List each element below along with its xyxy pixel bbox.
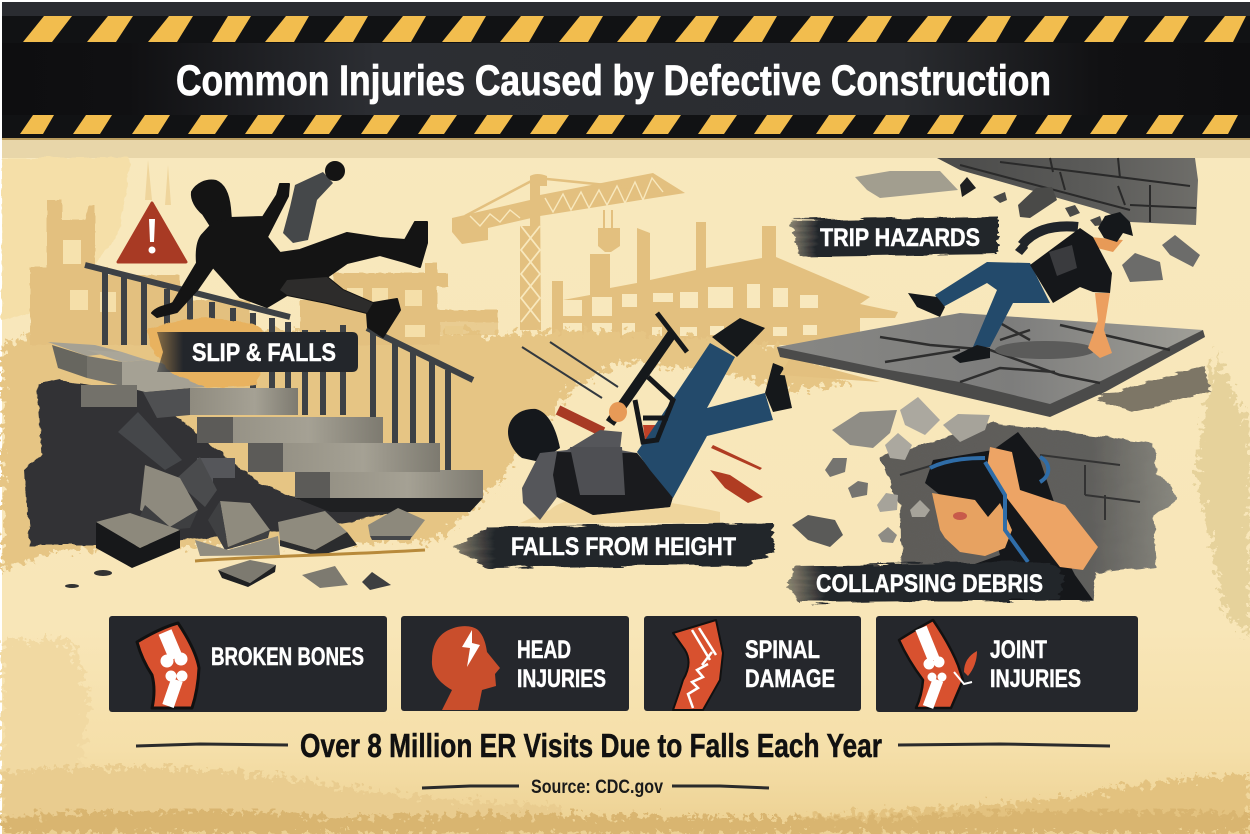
hazard stripes: top [23, 16, 1246, 42]
illustration: trip hazards [777, 158, 1210, 417]
crumbling wall [937, 158, 1198, 225]
wall rocks [792, 397, 990, 547]
text: spinal damage: SPINAL [745, 636, 820, 664]
crane silhouette [452, 173, 685, 330]
text: head injuries: HEAD [517, 636, 571, 664]
icon: head with lightning [432, 626, 500, 710]
label: slip and falls: SLIP & FALLS [192, 339, 336, 367]
red shards [710, 445, 763, 503]
text: spinal damage: DAMAGE [745, 665, 835, 693]
centre building silhouette [440, 222, 898, 345]
label: trip hazards: TRIP HAZARDS [820, 224, 980, 252]
panel: joint injuries [876, 616, 1138, 712]
header banner [2, 2, 1250, 140]
text: joint injuries: INJURIES [990, 665, 1081, 693]
label: slip and falls [148, 318, 358, 388]
slab shadow [1095, 365, 1210, 412]
concrete steps [48, 342, 483, 512]
text: broken bones: BROKEN BONES [211, 643, 364, 671]
label: collapsing debris: COLLAPSING DEBRIS [816, 570, 1043, 598]
title: Common Injuries Caused by Defective Construction [176, 57, 1051, 105]
sheltering worker [925, 432, 1098, 600]
red bar [558, 410, 603, 432]
hazard stripes: bottom [20, 115, 1238, 134]
ladder frame [609, 313, 687, 442]
ground wash behind centre [470, 331, 850, 480]
panel: broken bones [109, 616, 387, 712]
label: trip hazards [790, 217, 998, 257]
grey rock plate [855, 171, 976, 198]
icon: knee joint [899, 620, 977, 708]
flying rocks [993, 187, 1200, 282]
text: joint injuries: JOINT [990, 636, 1047, 664]
text: head injuries: INJURIES [517, 665, 606, 693]
brick wall [880, 423, 1178, 600]
label: collapsing debris [788, 562, 1065, 603]
warning triangle icon [118, 203, 186, 262]
speed lines [522, 342, 618, 398]
statistic line: Over 8 Million ER Visits Due to Falls Each Year [300, 727, 882, 764]
label: falls from height [453, 523, 775, 568]
falling worker silhouette [152, 162, 427, 337]
source line: Source: CDC.gov [531, 777, 663, 798]
illustration: falls from height [453, 313, 792, 568]
stair railing [85, 265, 473, 470]
falling worker [508, 318, 792, 520]
background: construction silhouettes [30, 160, 898, 523]
label: falls from height: FALLS FROM HEIGHT [511, 533, 736, 561]
illustration: collapsing debris [788, 397, 1178, 603]
panel: head injuries [401, 616, 629, 711]
left building silhouette [30, 160, 498, 345]
cracked concrete slab [777, 313, 1205, 417]
tripping worker [908, 212, 1133, 363]
stair rubble backing [25, 380, 410, 545]
fallen stair blocks [65, 412, 425, 590]
icon: broken leg bone [137, 623, 199, 708]
panel: spinal damage [644, 616, 861, 711]
illustration: slip and falls staircase scene [25, 162, 483, 590]
icon: spine [673, 620, 723, 710]
